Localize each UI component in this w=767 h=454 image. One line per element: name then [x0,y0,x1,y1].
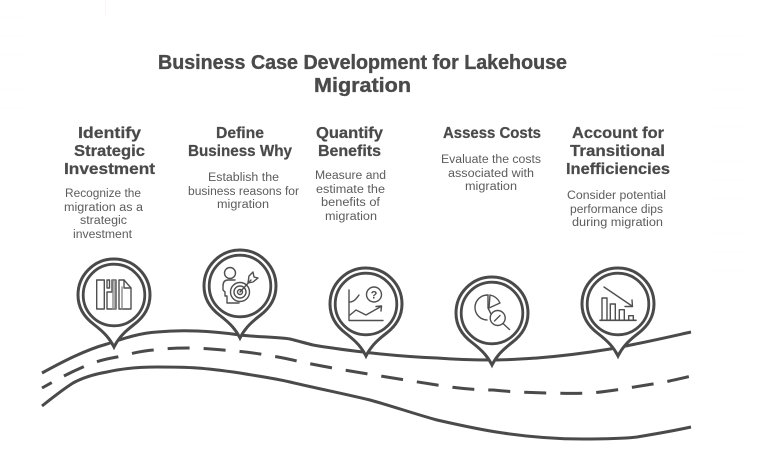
title [158,52,567,97]
pin with icon: books [78,259,150,347]
description [441,154,541,193]
heading: Strategic [74,143,145,160]
step 4: assess costs [441,125,541,365]
description: migration as a [64,202,144,214]
road [42,331,691,439]
heading: Identify [78,125,141,142]
heading: Assess Costs [443,125,541,142]
pin with icon: chart with question mark: ? [371,290,378,302]
description: migration [465,181,517,193]
heading: Inefficiencies [566,161,670,178]
description: strategic [80,215,127,227]
description: migration [217,199,269,211]
description: Establish the [208,172,279,184]
step 2: define business why [188,125,299,338]
title: Migration [314,75,411,97]
description: during migration [572,217,663,229]
description: business reasons for [188,186,299,198]
description: estimate the [316,184,385,196]
title: Business Case Development for Lakehouse [158,52,567,74]
road upper edge [42,331,691,373]
description [567,190,666,229]
description: Consider potential [567,190,666,202]
description: migration [325,211,377,223]
heading [64,125,155,178]
heading: Account for [572,125,664,142]
heading: Quantify [316,125,383,142]
heading: Transitional [570,143,665,160]
step 5: account for transitional inefficiencies [566,125,670,356]
heading [316,125,383,160]
pin with icon: chart with question mark [330,268,402,356]
description: Measure and [315,170,386,182]
pin with icon: pie chart and magnifier [456,277,528,365]
pin with icon: declining bar chart [582,268,654,356]
heading: Define [216,125,264,142]
description: Recognize the [65,188,141,200]
heading: Benefits [318,143,381,160]
road lower edge [42,367,691,439]
step 1: identify strategic investment [64,125,155,347]
description: associated with [448,168,534,180]
description: investment [73,229,133,241]
heading: Investment [64,161,155,178]
heading [188,125,292,160]
heading [566,125,670,178]
heading: Business Why [188,143,292,160]
description [64,188,144,241]
description [188,172,299,211]
pin with icon: person and target [204,250,276,338]
road centre dashes [42,348,691,393]
step 3: quantify benefits [315,125,402,356]
description: benefits of [321,197,381,209]
description: Evaluate the costs [441,154,541,166]
description: performance dips [570,204,663,216]
description [315,170,386,223]
